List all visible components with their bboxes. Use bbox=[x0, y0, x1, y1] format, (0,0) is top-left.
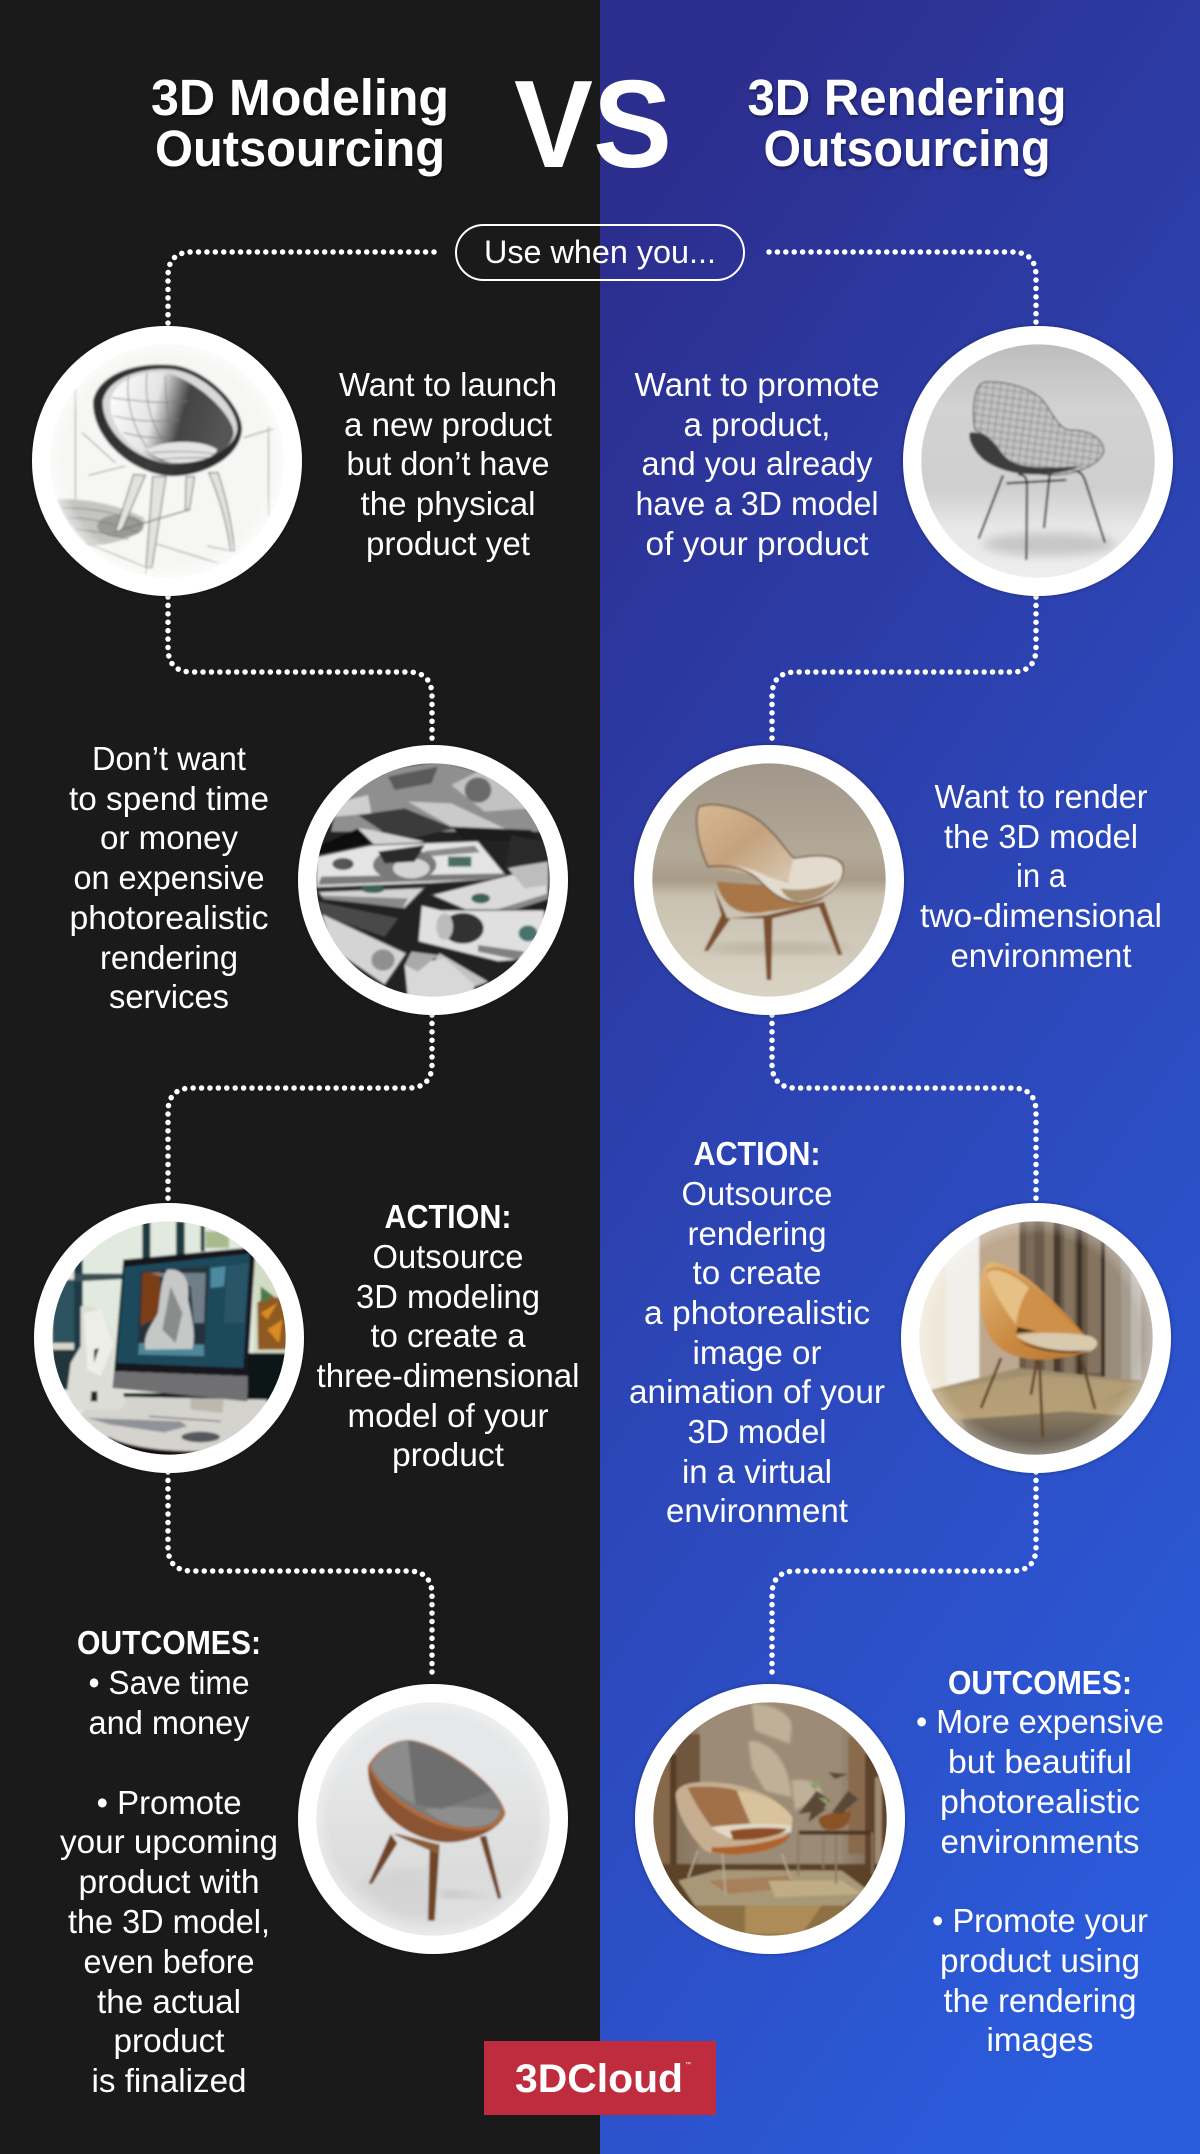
text: left outcomes: your upcoming bbox=[60, 1823, 278, 1860]
text: left step 2 bbox=[69, 740, 269, 1015]
text: right outcomes: product using bbox=[940, 1942, 1140, 1979]
text: left outcomes: • Save time bbox=[88, 1664, 250, 1701]
image: desktop monitor with 3D model bbox=[34, 1203, 304, 1473]
text: right step 1: of your product bbox=[646, 525, 868, 562]
text: right step 2: environment bbox=[950, 937, 1132, 974]
heading: left title: 3D Modeling bbox=[151, 69, 449, 126]
text: right action: ACTION: bbox=[694, 1135, 820, 1172]
text: left action: Outsource bbox=[372, 1238, 524, 1275]
logo: 3DCloud: ™ bbox=[685, 2061, 691, 2068]
text: right step 1: a product, bbox=[684, 406, 830, 443]
text: right outcomes: environments bbox=[940, 1823, 1140, 1860]
text: left step 1: a new product bbox=[344, 406, 552, 443]
text: right action: image or bbox=[692, 1334, 822, 1371]
text: right step 2: in a bbox=[1016, 857, 1067, 894]
text: right step 1: Want to promote bbox=[634, 366, 880, 403]
heading: right title: Outsourcing bbox=[764, 120, 1050, 177]
text: left action: model of your bbox=[348, 1397, 549, 1434]
image: grey egg chair bbox=[298, 1684, 568, 1954]
text: right outcomes: OUTCOMES: bbox=[948, 1664, 1132, 1701]
text: left step 1: product yet bbox=[366, 525, 530, 562]
text: left step 1: Want to launch bbox=[339, 366, 557, 403]
text: right step 2: two-dimensional bbox=[920, 897, 1162, 934]
text: left action: 3D modeling bbox=[356, 1278, 540, 1315]
image: beige lounge chair bbox=[634, 745, 904, 1015]
connector: right dotted path bbox=[769, 252, 1036, 1680]
text: right action: environment bbox=[666, 1492, 848, 1529]
text: right action: rendering bbox=[688, 1215, 826, 1252]
image: pile of dollar bills bbox=[298, 745, 568, 1015]
text: left step 2: photorealistic bbox=[70, 899, 268, 936]
text: right action: to create bbox=[692, 1254, 822, 1291]
text: left step 2: rendering bbox=[100, 939, 238, 976]
text: right outcomes: the rendering bbox=[944, 1982, 1136, 2019]
text: left action: ACTION: bbox=[384, 1198, 512, 1235]
text: right action: a photorealistic bbox=[644, 1294, 870, 1331]
text: left step 2: to spend time bbox=[69, 780, 269, 817]
text: left outcomes: product with bbox=[78, 1863, 260, 1900]
text: right outcomes: • Promote your bbox=[932, 1902, 1148, 1939]
text: left outcomes: the actual bbox=[97, 1983, 241, 2020]
text: left outcomes: is finalized bbox=[92, 2062, 246, 2099]
heading: left title: Outsourcing bbox=[155, 120, 445, 177]
logo: 3DCloud: 3DCloud bbox=[515, 2057, 683, 2101]
pill: use when you bbox=[456, 225, 744, 280]
text: right action: in a virtual bbox=[682, 1453, 832, 1490]
text: right step 2 bbox=[920, 778, 1162, 974]
text: left action: three-dimensional bbox=[316, 1357, 580, 1394]
heading: right title bbox=[748, 69, 1066, 177]
text: left outcomes: product bbox=[114, 2022, 224, 2059]
image: lounge chair room scene bbox=[635, 1684, 905, 1954]
image: pencil sketch chair bbox=[32, 326, 302, 596]
heading: left title bbox=[151, 69, 449, 177]
text: right action: 3D model bbox=[688, 1413, 826, 1450]
text: right outcomes: • More expensive bbox=[916, 1703, 1164, 1740]
text: right outcomes: but beautiful bbox=[948, 1743, 1132, 1780]
logo: 3DCloud bbox=[484, 2041, 716, 2115]
text: left outcomes: even before bbox=[84, 1943, 254, 1980]
text: left step 1: but don’t have bbox=[346, 445, 550, 482]
text: left outcomes: • Promote bbox=[96, 1784, 242, 1821]
panel: left dark background bbox=[0, 0, 600, 2154]
text: right step 1: have a 3D model bbox=[636, 485, 878, 522]
text: right outcomes: images bbox=[986, 2021, 1094, 2058]
image: wireframe chair bbox=[903, 326, 1173, 596]
text: left step 1: the physical bbox=[360, 485, 536, 522]
text: right outcomes bbox=[916, 1664, 1164, 2058]
text: right outcomes: photorealistic bbox=[940, 1783, 1140, 1820]
heading: VS: VS bbox=[514, 56, 672, 194]
connector: left dotted path bbox=[168, 252, 434, 1680]
pill: use when you: Use when you... bbox=[484, 234, 716, 270]
text: left action: to create a bbox=[370, 1317, 526, 1354]
text: left outcomes bbox=[60, 1624, 278, 2099]
text: left step 1 bbox=[339, 366, 557, 562]
text: left action bbox=[316, 1198, 580, 1473]
panel: right blue gradient background bbox=[600, 0, 1200, 2154]
text: left step 2: Don’t want bbox=[92, 740, 246, 777]
text: left step 2: or money bbox=[100, 819, 238, 856]
text: right step 1: and you already bbox=[642, 445, 873, 482]
text: right action: animation of your bbox=[629, 1373, 885, 1410]
image: orange shell chair by curtains bbox=[901, 1203, 1171, 1473]
text: left action: product bbox=[392, 1436, 504, 1473]
text: left step 2: on expensive bbox=[74, 859, 264, 896]
text: left outcomes: OUTCOMES: bbox=[77, 1624, 261, 1661]
text: right action: Outsource bbox=[682, 1175, 832, 1212]
text: left outcomes: the 3D model, bbox=[68, 1903, 270, 1940]
text: left step 2: services bbox=[109, 978, 229, 1015]
text: right step 2: the 3D model bbox=[944, 818, 1138, 855]
text: right step 1 bbox=[634, 366, 880, 562]
text: right action bbox=[629, 1135, 885, 1529]
heading: right title: 3D Rendering bbox=[748, 69, 1066, 126]
text: left outcomes: and money bbox=[88, 1704, 250, 1741]
text: right step 2: Want to render bbox=[934, 778, 1148, 815]
